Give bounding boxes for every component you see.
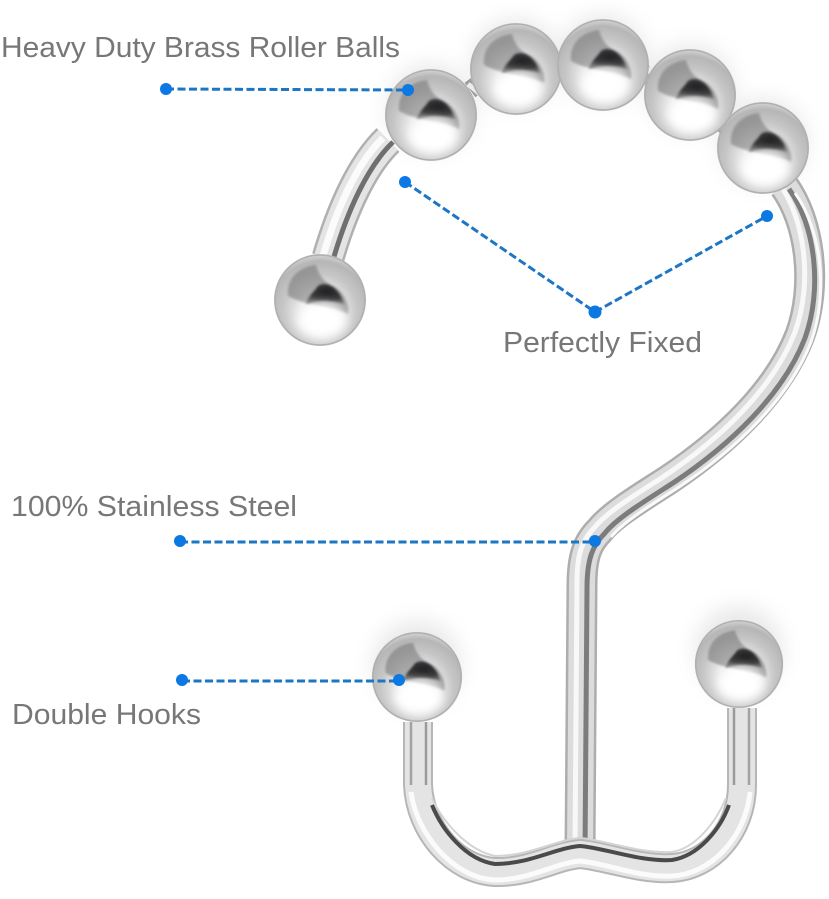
right hook ball xyxy=(695,620,783,708)
label: Perfectly Fixed: Perfectly Fixed xyxy=(503,327,702,359)
end ball on upper arm xyxy=(274,254,366,346)
label: 100% Stainless Steel: 100% Stainless Steel xyxy=(11,491,297,523)
hook body: upper left curved arm xyxy=(323,138,393,260)
callout: perfectly fixed leaders xyxy=(399,176,773,318)
soft shadow behind hook xyxy=(373,14,807,708)
hook body: main stainless wire xyxy=(575,183,821,853)
label: Heavy Duty Brass Roller Balls: Heavy Duty Brass Roller Balls xyxy=(1,32,400,64)
callout: double hooks leader xyxy=(176,674,405,686)
left hook ball xyxy=(372,632,462,722)
roller balls row xyxy=(385,19,809,194)
hook body: double hook base xyxy=(411,708,750,880)
roller spacer rings between balls xyxy=(468,54,734,128)
callout: stainless steel leader xyxy=(174,535,601,547)
label: Double Hooks: Double Hooks xyxy=(12,699,201,731)
callout: roller balls leader xyxy=(160,83,414,96)
